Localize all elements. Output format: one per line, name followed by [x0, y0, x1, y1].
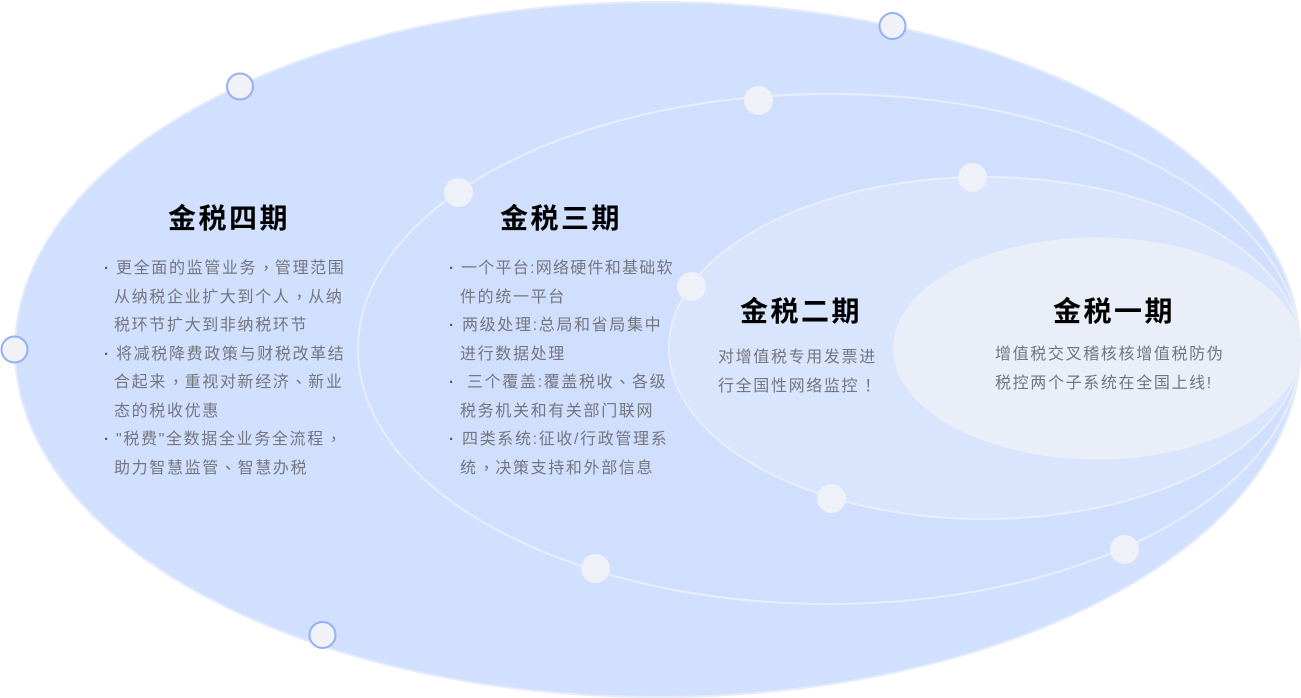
description: phase one: 增值税交叉稽核核增值税防伪 [995, 346, 1224, 363]
ellipse: phase one [893, 238, 1301, 460]
panel: phase four text [104, 203, 347, 476]
bullet list: phase three: 统 ，决策支持和外部信息 [460, 456, 654, 476]
ellipse: phase two [669, 177, 1300, 519]
ellipse: phase three [358, 94, 1300, 604]
bullet list: phase four: 更全面的监管业务 ，管理范围 [116, 256, 345, 277]
bullet list: phase four: · [104, 431, 111, 448]
description: phase two [718, 348, 882, 394]
description: phase two: 行全国性网络监控 ！ [718, 378, 882, 394]
bullet list: phase three: 件的统一平台 [460, 288, 566, 306]
description: phase one [995, 345, 1224, 392]
bullet list: phase four [104, 256, 347, 476]
bullet list: phase four: 合起来 ，重视对新经济 、新业 [114, 370, 343, 391]
bullet list: phase four: 助力智慧监管 、智慧办税 [114, 456, 308, 476]
panel: phase three text [449, 203, 674, 476]
description: phase one: 税控两个子系统在全国上线! [995, 374, 1213, 392]
bullet list: phase three: · [449, 431, 456, 448]
bullet list: phase four: · [104, 260, 111, 277]
bullet list: phase three: · [449, 260, 456, 277]
panel: phase one text [995, 296, 1224, 392]
bullet list: phase three: 进行数据处理 [460, 346, 566, 362]
heading: phase one: 金税一期 [1053, 296, 1175, 327]
bullet list: phase three: 两级处理:总局和省局集中 [462, 317, 662, 334]
description: phase two: 对增值税专用发票进 [718, 349, 877, 366]
heading: phase three: 金税三期 [500, 203, 622, 234]
bullet list: phase four: 态的税收优惠 [114, 402, 220, 420]
inner ring nodes [444, 86, 1139, 583]
heading: phase four: 金税四期 [168, 203, 290, 234]
bullet list: phase three: · [449, 374, 456, 391]
bullet list: phase three: 四类系统:征收/行政管理系 [462, 431, 668, 448]
bullet list: phase three: 税务机关和有关部门联网 [460, 402, 654, 420]
bullet list: phase three: 一个平台:网络硬件和基础软 [461, 260, 674, 277]
bullet list: phase three: 三个覆盖:覆盖税收 、各级 [467, 370, 667, 391]
heading: phase two: 金税二期 [740, 296, 862, 327]
bullet list: phase three: · [449, 317, 456, 334]
bullet list: phase four: · [104, 346, 111, 362]
bullet list: phase four: 将减税降费政策与财税改革结 [116, 346, 345, 362]
bullet list: phase four: "税费"全数据全业务全流程 ， [116, 427, 347, 448]
bullet list: phase four: 从纳税企业扩大到个人 ，从纳 [114, 284, 343, 306]
bullet list: phase four: 税环节扩大到非纳税环节 [114, 317, 308, 334]
panel: phase two text [718, 296, 882, 394]
outer ring nodes [2, 13, 906, 648]
bullet list: phase three [449, 259, 674, 476]
